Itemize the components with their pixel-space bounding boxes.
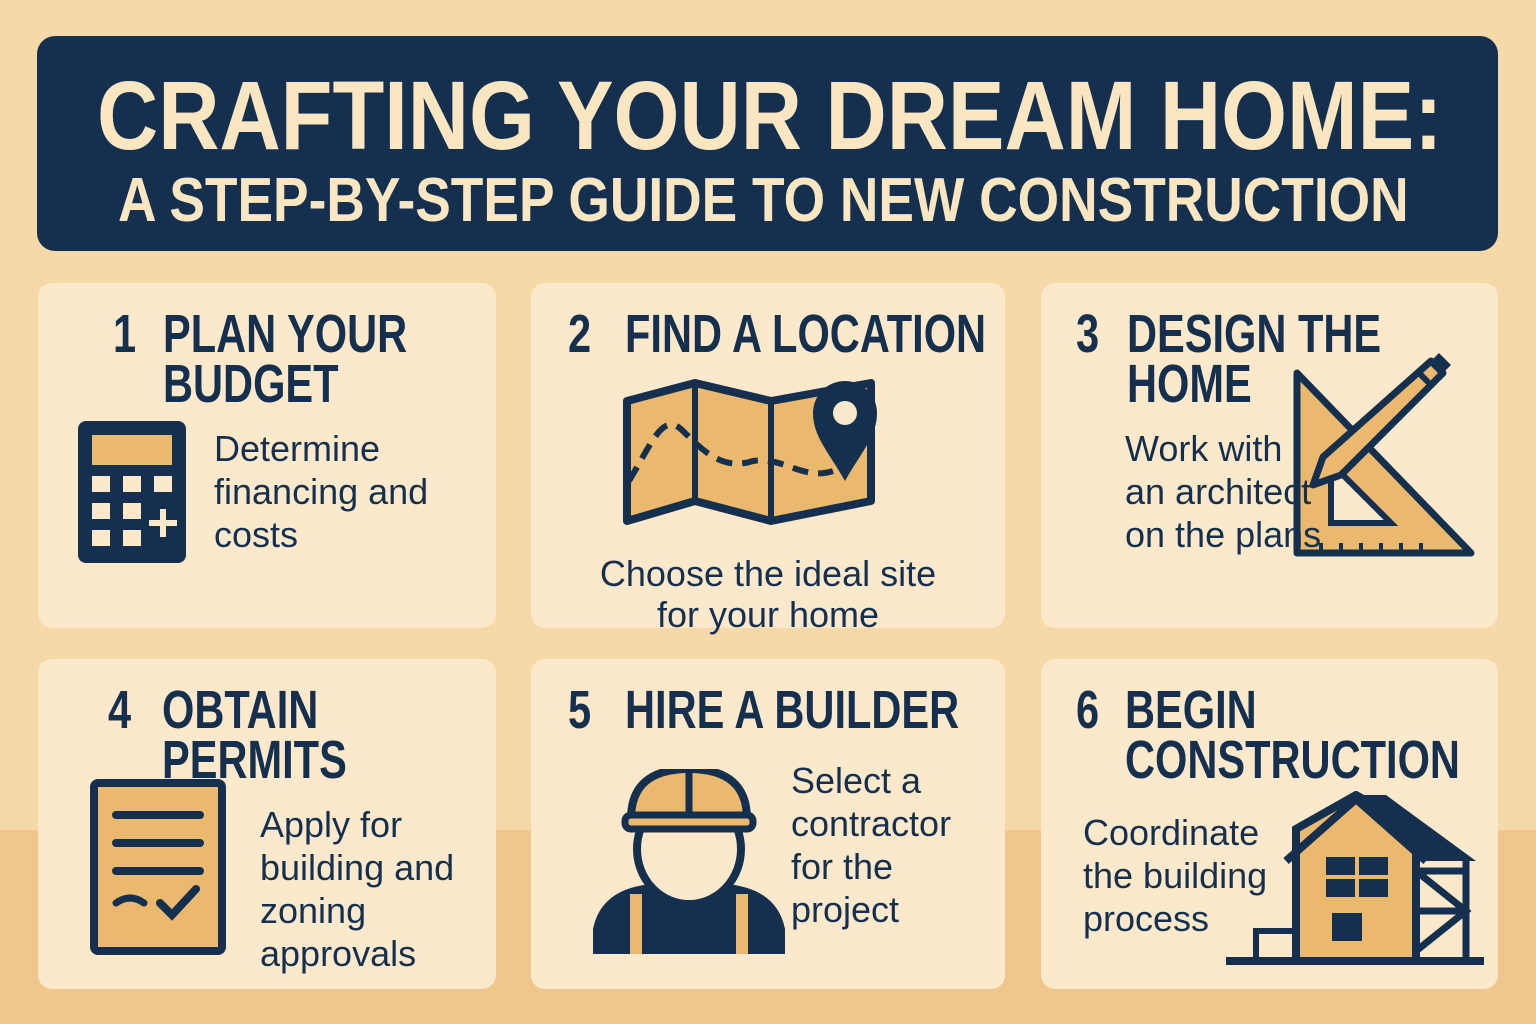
title banner	[37, 36, 1498, 251]
text 5: Select a	[791, 760, 921, 801]
heading 1: BUDGET	[163, 354, 339, 414]
subtitle: A STEP-BY-STEP GUIDE TO NEW CONSTRUCTION	[118, 166, 1409, 235]
text 5	[791, 760, 951, 930]
number 1: 1	[113, 304, 136, 364]
text 6: the building	[1083, 855, 1267, 896]
heading 6	[1125, 680, 1460, 790]
heading 4	[162, 680, 347, 790]
heading 1: PLAN YOUR	[163, 304, 407, 364]
text 4: building and	[260, 847, 454, 888]
heading 6: CONSTRUCTION	[1125, 730, 1460, 790]
icon: builder	[593, 769, 785, 954]
number 2: 2	[568, 304, 591, 364]
icon: triangle ruler and pencil	[1294, 353, 1474, 556]
heading 4: PERMITS	[162, 730, 347, 790]
text 2: for your home	[657, 594, 879, 635]
number 6: 6	[1076, 680, 1099, 740]
text 5: project	[791, 889, 899, 930]
text 4: approvals	[260, 933, 416, 974]
heading 1	[163, 304, 407, 414]
heading 6: BEGIN	[1125, 680, 1257, 740]
text 1: financing and	[214, 471, 428, 512]
text 6: process	[1083, 898, 1209, 939]
text 4: Apply for	[260, 804, 402, 845]
number 5: 5	[568, 680, 591, 740]
text 1: Determine	[214, 428, 380, 469]
text 2: Choose the ideal site	[600, 553, 936, 594]
text 3: Work with	[1125, 428, 1282, 469]
heading 3	[1127, 304, 1381, 414]
text 5: contractor	[791, 803, 951, 844]
text 6: Coordinate	[1083, 812, 1259, 853]
icon: permit document	[90, 779, 226, 955]
text 2	[600, 553, 936, 635]
panel: step 3	[1041, 283, 1498, 628]
heading 4: OBTAIN	[162, 680, 318, 740]
text 1: costs	[214, 514, 298, 555]
text 4	[260, 804, 454, 974]
title: CRAFTING YOUR DREAM HOME:	[97, 61, 1442, 170]
heading 2: FIND A LOCATION	[625, 304, 986, 364]
icon: map pin	[623, 379, 877, 525]
text 4: zoning	[260, 890, 366, 931]
panel: step 2	[531, 283, 1005, 628]
text 5: for the	[791, 846, 893, 887]
heading 5: HIRE A BUILDER	[625, 680, 959, 740]
text 6	[1083, 812, 1267, 939]
icon: calculator	[78, 421, 186, 563]
panel: step 6	[1041, 659, 1498, 989]
text 3: on the plans	[1125, 514, 1321, 555]
text 1	[214, 428, 428, 555]
text 3: an architect	[1125, 471, 1311, 512]
number 3: 3	[1076, 304, 1099, 364]
heading 3: HOME	[1127, 354, 1252, 414]
text 3	[1125, 428, 1321, 555]
panel: step 5	[531, 659, 1005, 989]
number 4: 4	[108, 680, 131, 740]
icon: house under construction	[1226, 791, 1484, 965]
heading 3: DESIGN THE	[1127, 304, 1381, 364]
panel: step 4	[38, 659, 496, 989]
panel: step 1	[38, 283, 496, 628]
